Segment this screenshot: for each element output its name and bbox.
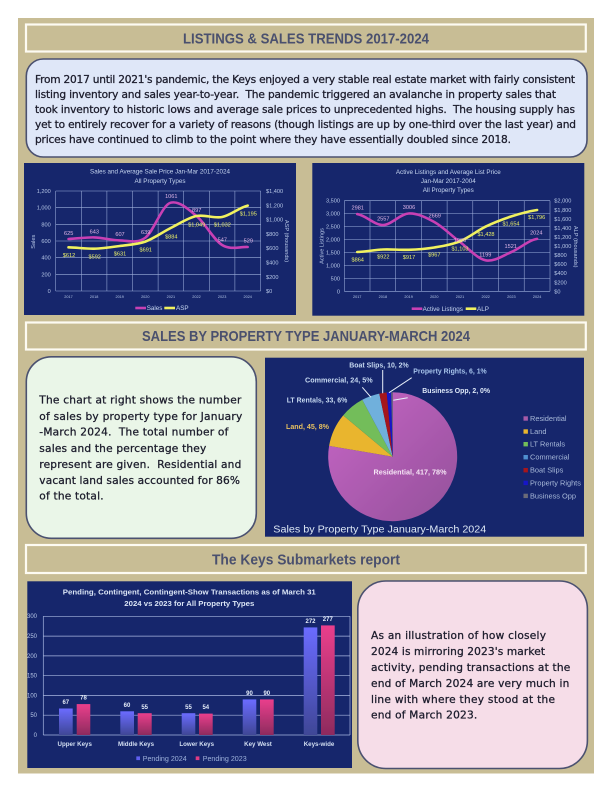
chart: active listings and average list price: 500: [331, 276, 340, 282]
panel: property type explanation: vacant land sales accounted for 86%: [39, 475, 240, 487]
chart: sales and average sale price: ASP: [176, 305, 189, 312]
chart: active listings and average list price: $200: [554, 280, 567, 286]
chart: sales and average sale price: 0: [48, 289, 51, 295]
chart: active listings and average list price: $917: [403, 255, 415, 261]
chart: active listings and average list price: $967: [428, 252, 441, 258]
chart: active listings and average list price: $400: [554, 271, 567, 277]
chart: active listings and average list price: Active Listings and Average List Price: [396, 169, 501, 176]
chart: active listings and average list price: $600: [554, 262, 567, 268]
chart: pending transactions bars: [27, 581, 352, 768]
panel: mirroring 2023 callout: [358, 581, 587, 768]
chart: pending transactions bars: Middle Keys: [118, 741, 155, 748]
chart: pending transactions bars: 54: [202, 705, 210, 711]
panel: mirroring 2023 callout: activity, pending transactions at the: [371, 662, 570, 674]
panel: mirroring 2023 callout: line with where they stood at the: [371, 694, 555, 706]
chart: active listings and average list price: 2557: [377, 217, 390, 223]
chart: sales and average sale price: [24, 163, 296, 315]
chart: pending transactions bars: 67: [62, 700, 70, 706]
chart: active listings and average list price: 2024: [530, 231, 543, 237]
chart: sales and average sale price: 2019: [115, 295, 124, 299]
chart: active listings and average list price: $1,600: [554, 217, 571, 223]
chart: active listings and average list price: 2023: [507, 295, 516, 299]
chart: pending transactions bars: Keys-wide: [304, 741, 335, 748]
chart: pending transactions bars: 55: [141, 705, 149, 711]
pie legend: Commercial: [530, 453, 570, 462]
chart: active listings and average list price: All Property Types: [423, 187, 474, 194]
chart: pending transactions bars: 100: [27, 693, 38, 699]
chart: active listings and average list price: $2,000: [554, 199, 571, 205]
heading: listings and sales trends: LISTINGS & SALES TRENDS 2017-2024: [183, 30, 430, 48]
chart: pending transactions bars: 90: [246, 691, 253, 697]
chart: sales and average sale price: $592: [88, 254, 101, 260]
chart: sales and average sale price: $1,000: [266, 218, 283, 224]
chart: sales and average sale price: 2023: [218, 295, 226, 299]
heading: keys submarkets report: [26, 545, 586, 573]
chart: sales and average sale price: 1,200: [37, 189, 51, 195]
chart: sales and average sale price: 800: [41, 222, 51, 228]
chart: active listings and average list price: 3,000: [326, 212, 340, 218]
chart: active listings and average list price: 2,000: [326, 238, 340, 244]
chart: sales and average sale price: 529: [244, 239, 253, 245]
panel: mirroring 2023 callout: As an illustration of how closely: [371, 630, 546, 642]
chart: sales and average sale price: 897: [192, 208, 201, 214]
panel: mirroring 2023 callout: end of March 2024 are very much in: [371, 678, 569, 690]
chart: active listings and average list price: $922: [377, 255, 390, 261]
panel: property type explanation: -March 2024. The total number of: [39, 427, 229, 439]
chart: pending transactions bars: 300: [27, 614, 38, 620]
chart: active listings and average list price: 1521: [504, 244, 517, 250]
bars 2024: [59, 627, 317, 735]
chart: active listings and average list price: 2981: [351, 206, 364, 212]
heading: sales by property type: SALES BY PROPERTY TYPE JANUARY-MARCH 2024: [142, 328, 471, 345]
chart: sales and average sale price: $200: [266, 275, 278, 281]
chart: sales and average sale price: 2024: [243, 295, 252, 299]
panel: intro text: From 2017 until 2021's pandemic, the Keys enjoyed a very stable real estate market with fairly consistent: [35, 74, 575, 86]
panel: property type explanation: of the total.: [39, 491, 104, 503]
chart: active listings and average list price: 2669: [428, 214, 441, 220]
chart: pending transactions bars: 250: [27, 634, 38, 640]
panel: mirroring 2023 callout: end of March 2023.: [371, 710, 477, 722]
chart: active listings and average list price: 2019: [404, 295, 413, 299]
chart: active listings and average list price: Active Listings: [320, 228, 326, 264]
chart: pending transactions bars: Pending, Contingent, Contingent-Show Transactions as of March 31: [63, 588, 317, 597]
chart: active listings and average list price: 1,500: [326, 250, 340, 256]
chart: active listings and average list price: 1,000: [326, 263, 340, 269]
chart: active listings and average list price: $1,654: [502, 222, 520, 228]
chart: sales by property type pie: Land, 45, 8%: [286, 424, 330, 431]
chart: sales and average sale price: $600: [266, 246, 278, 252]
heading: sales by property type: [26, 322, 586, 350]
chart: sales and average sale price: 200: [41, 272, 51, 278]
chart: sales and average sale price: Sales: [31, 235, 37, 249]
chart: active listings and average list price: 2020: [430, 295, 439, 299]
chart: sales by property type pie: Commercial, 24, 5%: [305, 378, 373, 385]
chart: sales and average sale price: $631: [114, 252, 126, 258]
chart: active listings and average list price: 0: [337, 289, 340, 295]
chart: active listings and average list price: 3006: [403, 205, 415, 211]
chart: pending transactions bars: 55: [185, 705, 192, 711]
pie legend: Residential: [530, 414, 567, 423]
heading: listings and sales trends: [26, 24, 586, 52]
chart: sales and average sale price: 1061: [165, 194, 178, 200]
chart: active listings and average list price: ALP (thousands): [572, 226, 578, 268]
chart: sales and average sale price: 607: [115, 232, 125, 238]
chart: active listings and average list price: 1199: [479, 252, 491, 258]
chart: active listings and average list price: $1,800: [554, 208, 571, 214]
chart: sales and average sale price: All Property Types: [135, 178, 185, 185]
chart: sales and average sale price: 639: [141, 230, 150, 236]
chart: sales and average sale price: 2018: [90, 295, 98, 299]
chart: sales and average sale price: $691: [139, 247, 152, 253]
chart: active listings and average list price: 2022: [481, 295, 490, 299]
chart: active listings and average list price: 2021: [456, 295, 464, 299]
chart: pending transactions bars: 0: [34, 733, 38, 739]
panel: intro text: listing inventory and sales year-to-year. The pandemic triggered an avalanche in property sales that: [35, 89, 556, 101]
chart: sales and average sale price: 547: [218, 237, 227, 243]
chart: sales and average sale price: 600: [41, 239, 51, 245]
chart: sales by property type pie: Sales by Property Type January-March 2024: [273, 524, 486, 536]
chart: sales by property type pie: [265, 358, 584, 537]
chart: sales and average sale price: 643: [90, 229, 99, 235]
chart: active listings and average list price: 2018: [379, 295, 387, 299]
chart: sales and average sale price: $0: [266, 289, 272, 295]
pie legend: Business Opp: [530, 491, 576, 500]
chart: sales by property type pie: Business Opp, 2, 0%: [422, 388, 491, 395]
chart: active listings and average list price: $800: [554, 253, 567, 259]
chart: sales by property type pie: Residential, 417, 78%: [374, 470, 447, 477]
panel: property type explanation: sales and the percentage they: [39, 443, 206, 455]
chart: sales and average sale price: ASP (thousands): [283, 220, 289, 262]
chart: sales and average sale price: 2017: [64, 295, 73, 299]
pie legend: Property Rights: [530, 478, 581, 487]
chart: sales and average sale price: $1,032: [214, 223, 231, 229]
chart: sales and average sale price: 2020: [141, 295, 150, 299]
chart: active listings and average list price: ALP: [477, 306, 489, 313]
chart: sales and average sale price: $800: [266, 232, 278, 238]
panel: property type explanation: The chart at right shows the number: [38, 395, 242, 407]
chart: active listings and average list price: 2017: [353, 295, 361, 299]
chart: pending transactions bars: 2024 vs 2023 for All Property Types: [124, 599, 254, 608]
chart: sales and average sale price: 2021: [167, 295, 175, 299]
chart: sales and average sale price: Sales and Average Sale Price Jan-Mar 2017-2024: [90, 168, 230, 175]
chart: active listings and average list price: $1,103: [451, 246, 469, 252]
chart: sales and average sale price: $612: [63, 253, 75, 259]
chart: sales and average sale price: 400: [41, 256, 51, 262]
chart: sales by property type pie: Boat Slips, 10, 2%: [349, 363, 409, 370]
chart: pending transactions bars: Pending 2023: [203, 754, 247, 763]
panel: property type explanation: of sales by property type for January: [39, 411, 242, 423]
panel: intro text: took inventory to historic lows and average sale prices to unprecedented highs. The housing supply has: [35, 104, 575, 116]
chart: pending transactions bars: 272: [305, 619, 316, 625]
chart: active listings and average list price: $0: [554, 289, 561, 295]
chart: sales and average sale price: $1,400: [266, 189, 283, 195]
panel: intro text: yet to entirely recover for a variety of reasons (though listings are up by one-third over the last year) and: [35, 119, 576, 131]
chart: pending transactions bars: 90: [263, 691, 271, 697]
chart: pending transactions bars: Key West: [244, 741, 272, 748]
chart: pending transactions bars: 50: [30, 713, 38, 719]
chart: active listings and average list price: 3,500: [326, 199, 340, 205]
chart: sales and average sale price: 2022: [192, 295, 201, 299]
pie slices: [328, 392, 457, 521]
chart: active listings and average list price: 2024: [533, 295, 541, 299]
chart: active listings and average list price: 1900: [454, 238, 466, 244]
panel: intro text: prices have continued to climb to the point where they have essentially doubled since 2018.: [35, 134, 511, 146]
chart: active listings and average list price: Active Listings: [423, 306, 463, 313]
chart: sales and average sale price: $1,049: [188, 223, 205, 229]
chart: active listings and average list price: 2,500: [326, 225, 340, 231]
chart: active listings and average list price: [312, 163, 584, 316]
pie legend: [524, 414, 581, 500]
chart: active listings and average list price: $1,796: [528, 215, 545, 221]
chart: sales and average sale price: 1,000: [37, 206, 51, 212]
chart: sales and average sale price: $1,200: [266, 203, 283, 209]
chart: active listings and average list price: $1,000: [554, 244, 571, 250]
chart: active listings and average list price: Jan-Mar 2017-2004: [421, 178, 476, 185]
chart: sales and average sale price: $884: [165, 235, 178, 241]
chart: pending transactions bars: 150: [27, 674, 38, 680]
pie legend: Boat Slips: [530, 466, 564, 475]
panel: property type explanation: [26, 357, 256, 538]
chart: sales by property type pie: LT Rentals, 33, 6%: [287, 397, 348, 404]
chart: pending transactions bars: Lower Keys: [179, 741, 215, 748]
chart: sales and average sale price: $1,195: [240, 211, 257, 217]
chart: pending transactions bars: 277: [323, 617, 333, 623]
chart: pending transactions bars: 60: [124, 703, 131, 709]
chart: sales by property type pie: Property Rights, 6, 1%: [413, 368, 487, 375]
chart: pending transactions bars: 200: [27, 654, 38, 660]
bars 2023: [77, 625, 335, 735]
panel: property type explanation: represent are given. Residential and: [39, 459, 241, 471]
chart: active listings and average list price: $1,400: [554, 226, 571, 232]
pie legend: LT Rentals: [530, 440, 565, 449]
chart: active listings and average list price: $1,200: [554, 235, 571, 241]
chart: pending transactions bars: Pending 2024: [143, 754, 187, 763]
panel: mirroring 2023 callout: 2024 is mirroring 2023's market: [371, 646, 545, 658]
chart: pending transactions bars: Upper Keys: [58, 741, 92, 748]
chart: sales and average sale price: Sales: [147, 305, 162, 312]
pie legend: Land: [530, 427, 546, 436]
chart: active listings and average list price: $864: [351, 257, 364, 263]
chart: sales and average sale price: 625: [64, 231, 73, 237]
chart: pending transactions bars: 78: [80, 695, 87, 701]
chart: active listings and average list price: $1,428: [477, 232, 495, 238]
panel: intro text: [26, 59, 587, 157]
chart: sales and average sale price: $400: [266, 260, 278, 266]
heading: keys submarkets report: The Keys Submarkets report: [212, 552, 400, 569]
